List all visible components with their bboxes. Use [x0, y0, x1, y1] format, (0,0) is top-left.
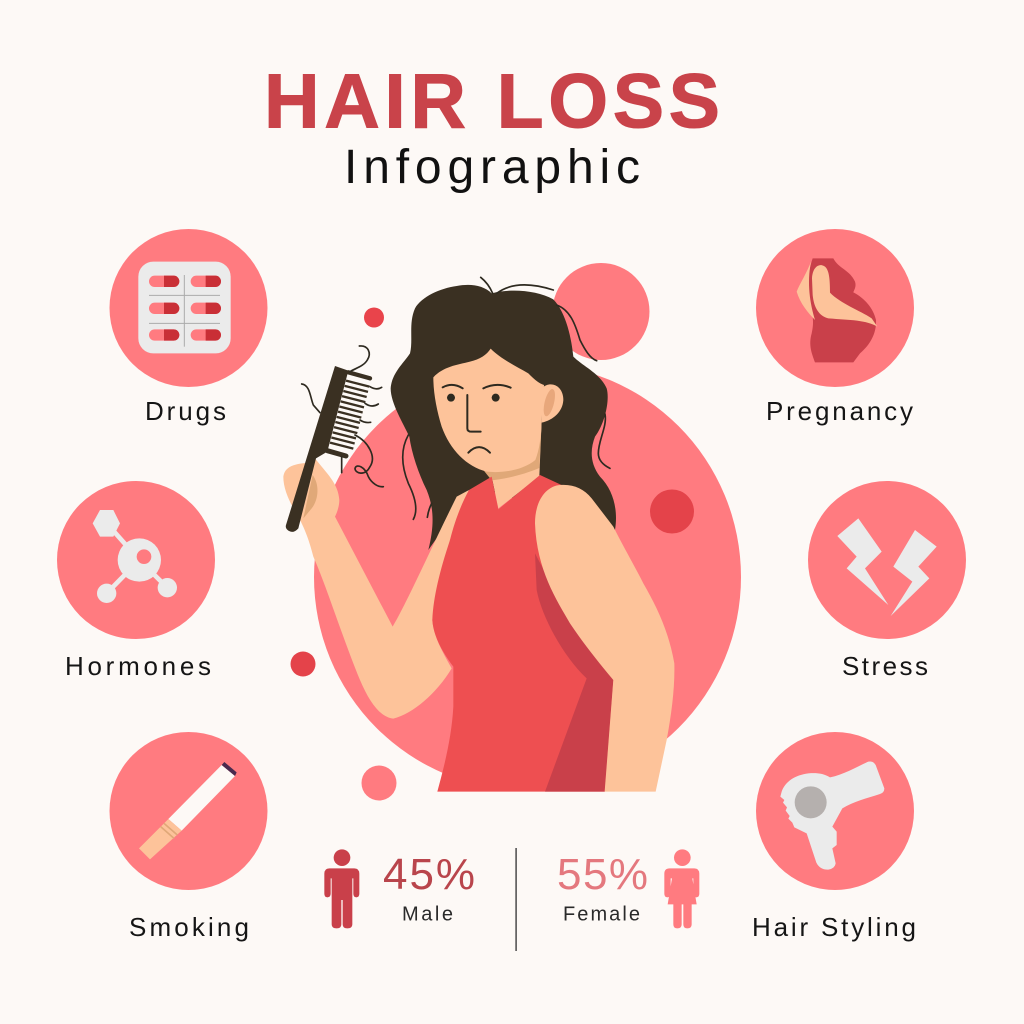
stat: male — [324, 849, 475, 928]
title: HAIR LOSS — [264, 58, 720, 144]
icon: broken lightning bolts — [837, 518, 937, 616]
illustration: woman with comb — [283, 277, 674, 792]
icon: pregnant body — [797, 258, 877, 362]
icon: hair dryer — [780, 761, 884, 870]
icon: cigarette — [139, 762, 237, 859]
panel: smoking — [110, 732, 268, 942]
icon: male figure — [324, 849, 359, 928]
panel: hormones — [57, 481, 215, 681]
head and face — [433, 349, 563, 508]
value: 55%: 55% — [557, 850, 648, 899]
label: male: Male — [402, 904, 453, 926]
panel: stress — [808, 481, 966, 681]
value: 45%: 45% — [383, 850, 475, 899]
label: smoking: Smoking — [129, 912, 249, 942]
title: Infographic — [344, 141, 640, 194]
label: drugs: Drugs — [145, 396, 226, 426]
panel: pregnancy — [756, 229, 914, 426]
label: hair styling: Hair Styling — [752, 912, 916, 942]
label: stress: Stress — [842, 651, 928, 681]
icon: hormone molecule — [93, 510, 177, 603]
label: hormones: Hormones — [65, 651, 211, 681]
raised arm — [283, 458, 469, 719]
title — [264, 58, 720, 194]
hair — [391, 285, 616, 550]
stat: female — [557, 849, 699, 928]
label: pregnancy: Pregnancy — [766, 396, 913, 426]
divider — [515, 848, 517, 951]
panel: drugs — [110, 229, 268, 426]
loose hair strands — [302, 277, 610, 519]
background circles — [290, 263, 741, 800]
icon: pill blister pack — [138, 262, 231, 353]
panel: hair styling — [752, 732, 916, 942]
icon: female figure — [664, 849, 699, 928]
comb — [286, 366, 370, 532]
label: female: Female — [563, 904, 640, 926]
red dress — [432, 475, 613, 792]
shoulder and arm — [535, 485, 674, 792]
